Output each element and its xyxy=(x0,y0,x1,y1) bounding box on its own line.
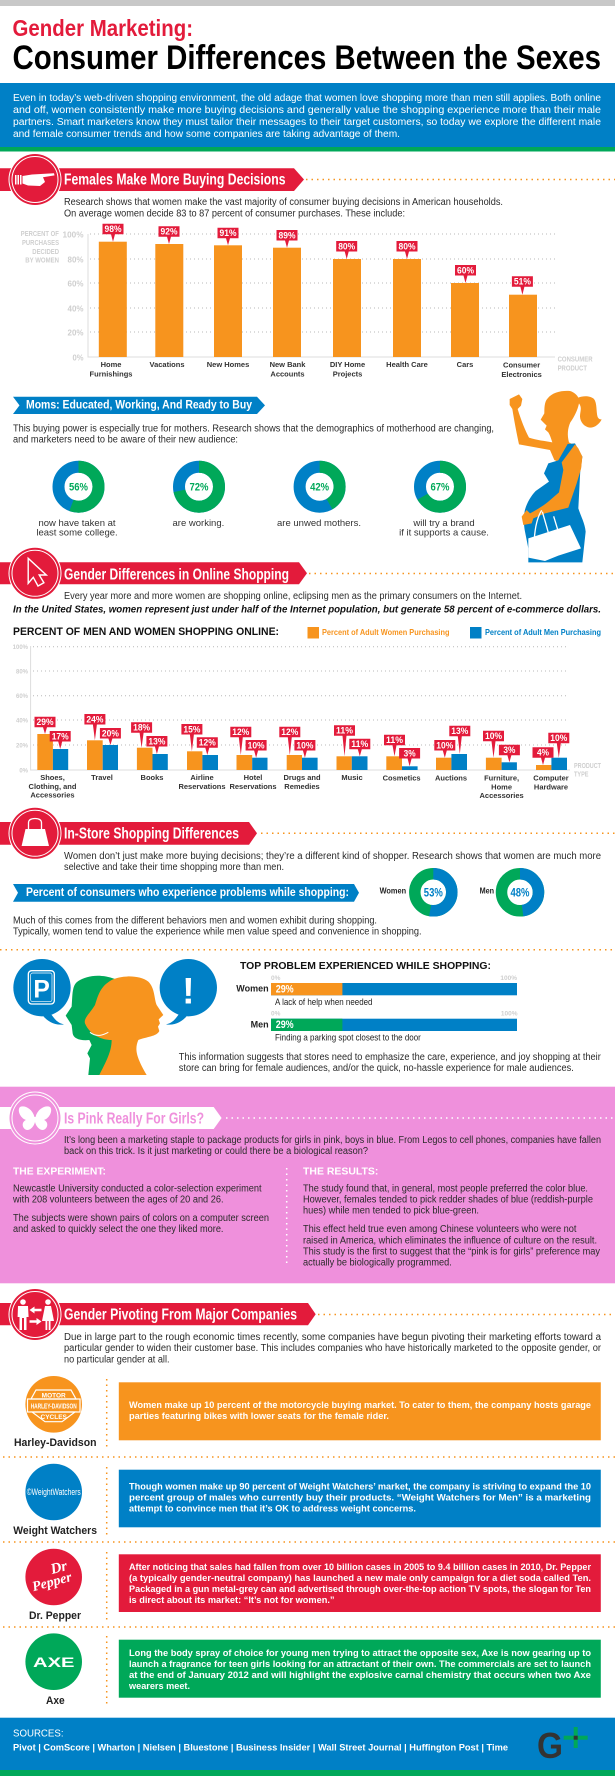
column: the experiment: THE EXPERIMENT: xyxy=(13,1165,106,1177)
company: weight watchers: percent group of males who currently buy their products. “Weight Watchers for Men” is a marketing xyxy=(129,1493,591,1504)
icon: shopping bag xyxy=(22,818,49,846)
bars: airline reservations xyxy=(178,724,226,791)
donut: 42% unwed xyxy=(277,467,361,529)
ribbon: moms xyxy=(13,397,265,414)
text: pivoting intro xyxy=(64,1332,602,1366)
axis labels: 40% xyxy=(16,718,29,724)
bars: cosmetics: 3% xyxy=(404,748,416,759)
bars: cosmetics: Cosmetics xyxy=(383,774,421,782)
bars: furniture, home accessories: Accessories xyxy=(479,791,524,800)
bars: drugs and remedies xyxy=(279,727,321,791)
axis labels: DECIDED xyxy=(32,247,59,256)
axis labels: PRODUCT xyxy=(558,364,587,373)
bars: shoes, clothing and accessories: 17% xyxy=(52,731,69,742)
company: weight watchers xyxy=(13,1464,601,1537)
bar: vacations 92%: 92% xyxy=(160,227,178,238)
bar: new homes 91%: 91% xyxy=(220,228,237,239)
bars: airline reservations: Airline xyxy=(190,773,214,782)
bars: travel: Travel xyxy=(91,773,113,782)
bars: hotel reservations: Hotel xyxy=(244,773,262,782)
legend: Percent of Adult Women Purchasing xyxy=(322,627,450,637)
bar: home furnishings 98%: Home xyxy=(101,360,121,369)
icon: butterfly xyxy=(19,1106,51,1130)
icon: parking speech bubble: P xyxy=(33,977,50,1004)
logo: dr pepper xyxy=(25,1549,82,1605)
logo: G+: G xyxy=(537,1725,563,1766)
bar: men top problem: Finding a parking spot closest to the door xyxy=(275,1033,421,1043)
logo: harley-davidson: CYCLES xyxy=(41,1414,68,1421)
bar chart: purchases decided by women xyxy=(21,224,593,379)
panel: introduction: partners. Smart marketers know they must tailor their messages to their target customers, so today we explore the different male xyxy=(13,117,601,128)
axis labels: PRODUCT xyxy=(574,761,601,770)
company: dr. pepper: After noticing that sales had fallen from over 10 billion cases in 2005 to 9.4 billion cases in 2010, Dr. Pepper xyxy=(129,1562,591,1573)
bar: women top problem xyxy=(236,975,517,1007)
donut: 67% cause: if it supports a cause. xyxy=(399,528,489,539)
text: buying decisions intro xyxy=(64,197,503,220)
bars: drugs and remedies: Remedies xyxy=(284,782,320,791)
text: buying decisions intro: Research shows that women make the vast majority of consumer buying decisions in American households. xyxy=(64,197,503,208)
bars: music: 11% xyxy=(336,726,353,737)
text: buying decisions intro: On average women decide 83 to 87 percent of consumer purchases. These include: xyxy=(64,209,405,220)
bar: men top problem: Men xyxy=(251,1020,269,1030)
bars: auctions: 10% xyxy=(436,740,454,751)
bars: hotel reservations: Reservations xyxy=(229,782,277,791)
company: dr. pepper xyxy=(25,1549,601,1622)
axis labels: PERCENT OF xyxy=(21,229,59,238)
bars: furniture, home accessories xyxy=(479,731,524,800)
section heading: gender pivoting: Gender Pivoting From Major Companies xyxy=(64,1306,297,1323)
text: in-store intro xyxy=(64,851,601,873)
bar: consumer electronics 51%: Consumer xyxy=(503,360,540,370)
bars: shoes, clothing and accessories: Shoes, xyxy=(40,773,65,782)
axis labels: 100% xyxy=(62,230,84,240)
donut: men 48% xyxy=(480,874,538,911)
section heading: online shopping: Gender Differences in Online Shopping xyxy=(64,566,289,583)
section heading: gender pivoting xyxy=(0,1288,615,1341)
axis labels: 100% xyxy=(13,645,29,651)
bar: women top problem: A lack of help when needed xyxy=(275,997,372,1007)
donut: 56% college: least some college. xyxy=(36,528,118,539)
logo: axe: AXE xyxy=(33,1655,74,1670)
bar: new bank accounts 89% xyxy=(270,230,306,379)
logo: dr pepper: Pepper xyxy=(31,1570,74,1595)
company: dr. pepper: (a typically gender-neutral company) has launched a new male only campaign for a diet soda called Ten. xyxy=(129,1573,591,1584)
bar: new homes 91% xyxy=(207,228,249,369)
donut: 72% working xyxy=(173,467,224,529)
icon: two heads with speech bubbles xyxy=(13,959,217,1075)
company: axe: launch a fragrance for teen girls looking for an attractant of their own. The commercials are set to launch xyxy=(129,1659,591,1670)
icon: parking speech bubble xyxy=(13,959,71,1025)
bars: cosmetics: 11% xyxy=(386,735,403,746)
bar: men top problem: 29% xyxy=(276,1019,294,1031)
bar: home furnishings 98%: Furnishings xyxy=(90,370,132,379)
company: axe: Axe xyxy=(46,1695,65,1707)
icon: pointing hand xyxy=(15,173,54,186)
bar: women top problem: 0% xyxy=(271,975,281,982)
bars: airline reservations: 12% xyxy=(199,738,216,749)
axis labels xyxy=(21,229,593,373)
icon: man, woman and arrows xyxy=(18,1299,54,1330)
axis labels: BY WOMEN xyxy=(25,256,59,264)
axis labels: PURCHASES xyxy=(22,238,59,247)
column: the results: actually be biologically programmed. xyxy=(303,1257,452,1268)
column: the experiment: and asked to quickly select the one they liked more. xyxy=(13,1224,224,1235)
company: dr. pepper: Packaged in a gun metal-grey can and advertised through over-the-top action TV spots, the slogan for Ten xyxy=(129,1584,591,1595)
heading: top problem: TOP PROBLEM EXPERIENCED WHILE SHOPPING: xyxy=(240,960,491,972)
donut: women 53%: 53% xyxy=(424,888,443,900)
axis labels: 40% xyxy=(68,304,84,314)
logo: weight watchers: ©WeightWatchers xyxy=(27,1487,81,1497)
text: in-store intro: selective and take their time shopping more than men. xyxy=(64,862,284,873)
donut: 67% cause: will try a brand xyxy=(412,518,475,529)
bars: furniture, home accessories: 3% xyxy=(503,745,516,756)
bars: travel: 24% xyxy=(86,714,104,725)
text: buying power of mothers xyxy=(13,424,494,446)
donut: 42% unwed: are unwed mothers. xyxy=(277,518,361,529)
bars: airline reservations: Reservations xyxy=(178,782,226,791)
text: store suggestions: store can bring for female audiences, and/or the quick, no-hassle experience for male audiences. xyxy=(179,1063,574,1074)
text: online shopping intro: Every year more and more women are shopping online, eclipsing men as the primary consumers on the Internet. xyxy=(64,591,522,602)
donut: men 48%: 48% xyxy=(510,888,530,900)
donut: women 53% xyxy=(380,874,452,911)
text: buying power of mothers: This buying power is especially true for mothers. Research shows that the demographics of motherhood are changing, xyxy=(13,424,494,435)
ribbon: consumers who experience problems: Percent of consumers who experience problems while shopping: xyxy=(26,887,349,899)
donut: 72% working: are working. xyxy=(173,518,224,529)
text: online shopping intro: In the United States, women represent just under half of the Internet population, but generate 58 percent of e-commerce dollars. xyxy=(13,605,601,616)
icon: exclamation speech bubble: ! xyxy=(182,969,195,1011)
text: pivoting intro: no particular gender at all. xyxy=(64,1354,170,1366)
legend: Percent of Adult Men Purchasing xyxy=(485,627,601,637)
bars: computer hardware: 10% xyxy=(550,733,568,744)
text: pivoting intro: Due in large part to the rough economic times recently, some companies have begun pivoting their marketing efforts toward a xyxy=(64,1332,601,1343)
bars: books: Books xyxy=(141,773,163,782)
bars: travel: 20% xyxy=(102,728,119,739)
column: the experiment xyxy=(12,1165,269,1235)
bar: home furnishings 98%: 98% xyxy=(104,224,122,235)
section heading: pink: Is Pink Really For Girls? xyxy=(64,1110,204,1127)
company: dr. pepper: is direct about its market: “It’s not for women.” xyxy=(129,1595,335,1606)
column: the results: THE RESULTS: xyxy=(303,1165,378,1177)
logo: harley-davidson: MOTOR xyxy=(42,1392,66,1400)
bar: consumer electronics 51%: Electronics xyxy=(501,370,542,379)
donut: 67% cause xyxy=(399,467,489,539)
column: the results: hues) while men tended to pick blue-green. xyxy=(303,1206,479,1217)
donut: 56% college xyxy=(36,467,118,539)
bars: airline reservations: 15% xyxy=(183,724,201,735)
bar: consumer electronics 51% xyxy=(501,276,542,379)
bars: travel xyxy=(84,714,121,782)
icon: pregnant woman shopping xyxy=(510,391,602,562)
company: axe: Long the body spray of choice for young men trying to attract the opposite sex, Axe is now gearing up to xyxy=(129,1648,591,1659)
ribbon: consumers who experience problems xyxy=(13,884,359,902)
axis labels: 60% xyxy=(16,694,29,700)
bar: health care 80% xyxy=(386,241,428,369)
bars: books: 13% xyxy=(148,736,166,747)
bars: drugs and remedies: 12% xyxy=(281,727,299,738)
bar: new bank accounts 89%: 89% xyxy=(278,230,296,241)
bar: diy home projects 80%: Projects xyxy=(333,370,362,379)
axis labels: 80% xyxy=(16,670,29,676)
bar: women top problem: Women xyxy=(236,984,269,994)
bars: furniture, home accessories: 10% xyxy=(485,731,502,742)
column: the results xyxy=(303,1165,600,1268)
bars: auctions: 13% xyxy=(451,726,469,737)
bar: diy home projects 80%: DIY Home xyxy=(330,360,365,369)
axis labels: 20% xyxy=(16,744,29,750)
footer: sources: SOURCES: xyxy=(13,1728,64,1740)
footer: sources: Pivot | ComScore | Wharton | Nielsen | Bluestone | Business Insider | Wall Street Journal | Huffington Post | Time xyxy=(13,1742,508,1753)
axis labels: 0% xyxy=(19,768,29,774)
bars: hotel reservations xyxy=(229,727,277,791)
axis labels: 60% xyxy=(68,278,84,288)
axis labels: 80% xyxy=(68,254,84,264)
bar: new bank accounts 89%: New Bank xyxy=(270,360,306,369)
footer: sources xyxy=(0,1718,615,1776)
section heading: online shopping xyxy=(0,547,615,600)
column: the results: The study found that, in general, most people preferred the color blue. xyxy=(303,1184,588,1195)
bar: men top problem: 100% xyxy=(501,1011,518,1018)
axis labels: 0% xyxy=(72,352,84,362)
logo: G+ xyxy=(537,1725,588,1766)
axis labels: TYPE xyxy=(574,770,588,779)
title: Gender Marketing: xyxy=(12,15,193,41)
axis labels: 20% xyxy=(68,328,84,338)
column: the experiment: Newcastle University conducted a color-selection experiment xyxy=(13,1184,262,1195)
company: harley-davidson: parties featuring bikes with lower seats for the female rider. xyxy=(129,1411,389,1422)
logo: harley-davidson: HARLEY-DAVIDSON xyxy=(31,1402,77,1410)
text: buying power of mothers: and marketers need to be aware of their new audience: xyxy=(13,435,238,446)
bar: new homes 91%: New Homes xyxy=(207,360,249,369)
bar: women top problem: 100% xyxy=(500,975,517,982)
section heading: in-store shopping: In-Store Shopping Differences xyxy=(64,826,239,843)
section heading: females make more buying decisions xyxy=(0,153,615,206)
bars: drugs and remedies: 10% xyxy=(296,740,314,751)
title xyxy=(12,15,601,77)
bars: auctions xyxy=(434,726,470,782)
bars: hotel reservations: 12% xyxy=(232,727,250,738)
column: the results: raised in America, which eliminates the influence of culture on the result. xyxy=(303,1235,597,1246)
company: axe: wearers meet. xyxy=(128,1681,190,1692)
company: axe: at the end of January 2012 and will highlight the explosive carnal chemistry that occurs when two Axe xyxy=(129,1670,591,1681)
bar: cars 60%: Cars xyxy=(457,360,473,369)
bars: computer hardware xyxy=(532,733,569,792)
bar: women top problem: 29% xyxy=(276,984,294,996)
bar: men top problem: 0% xyxy=(271,1011,281,1018)
legend xyxy=(308,627,601,638)
panel: is pink really for girls xyxy=(0,1087,615,1283)
bars: cosmetics xyxy=(383,735,421,782)
bar: vacations 92% xyxy=(149,226,185,369)
bars: shoes, clothing and accessories: 29% xyxy=(36,717,54,728)
bar: diy home projects 80%: 80% xyxy=(338,241,356,252)
bar: new bank accounts 89%: Accounts xyxy=(270,370,305,379)
company: harley-davidson xyxy=(14,1376,601,1449)
bar chart: online shopping by product type xyxy=(13,645,601,800)
panel: introduction xyxy=(0,83,615,152)
bars: computer hardware: Computer xyxy=(533,774,569,782)
bars: hotel reservations: 10% xyxy=(248,740,265,751)
panel: introduction: and off, women consistently make more buying decisions and generally value the shopping experience more than their male xyxy=(13,105,601,116)
column: the experiment: with 208 volunteers between the ages of 20 and 26. xyxy=(12,1195,223,1206)
bars: drugs and remedies: Drugs and xyxy=(283,773,321,782)
text: behaviours: Much of this comes from the different behaviors men and women exhibit during shopping. xyxy=(13,915,377,926)
company: weight watchers: Weight Watchers xyxy=(13,1525,97,1537)
bars: auctions: Auctions xyxy=(435,774,467,782)
panel: introduction: and female consumer trends and how some companies are taking advantage of them. xyxy=(13,129,400,140)
bars: music xyxy=(334,725,370,782)
donut: 56% college: now have taken at xyxy=(38,518,116,529)
donut: 72% working: 72% xyxy=(190,481,209,493)
logo: harley-davidson xyxy=(25,1376,82,1433)
icon: exclamation speech bubble xyxy=(160,959,217,1025)
logo: axe xyxy=(25,1633,82,1690)
bar: consumer electronics 51%: 51% xyxy=(514,277,531,288)
text: behaviours xyxy=(13,915,422,937)
text: in-store intro: Women don’t just make more buying decisions; they’re a different kind of shopper. Research shows that women are much more xyxy=(64,851,601,862)
company: harley-davidson: Women make up 10 percent of the motorcycle buying market. To cater to them, the company hosts garage xyxy=(129,1400,591,1411)
bars: books: 18% xyxy=(133,723,151,734)
ribbon: moms: Moms: Educated, Working, And Ready to Buy xyxy=(26,400,253,412)
icon: cursor xyxy=(28,558,46,586)
company: dr. pepper: Dr. Pepper xyxy=(29,1610,82,1622)
donut: men 48%: Men xyxy=(480,885,494,895)
company: weight watchers: attempt to convince men that it’s OK to address weight concerns. xyxy=(129,1504,416,1515)
bars: books xyxy=(131,722,168,782)
logo: weight watchers xyxy=(25,1464,82,1520)
bar: home furnishings 98% xyxy=(90,224,132,379)
text: behaviours: Typically, women tend to value the experience while men value speed and convenience in shopping. xyxy=(13,926,422,937)
section heading: in-store shopping xyxy=(0,807,615,860)
bars: shoes, clothing and accessories: Accessories xyxy=(30,791,75,800)
logo: dr pepper: Dr xyxy=(48,1558,69,1578)
column: the experiment: The subjects were shown pairs of colors on a computer screen xyxy=(13,1213,269,1224)
company: weight watchers: Though women make up 90 percent of Weight Watchers’ market, the company is striving to expand the 10 xyxy=(129,1481,591,1492)
bars: shoes, clothing and accessories xyxy=(29,717,77,800)
bar: diy home projects 80% xyxy=(330,241,365,379)
bar: cars 60%: 60% xyxy=(457,265,474,276)
text: store suggestions xyxy=(179,1052,601,1074)
bar: vacations 92%: Vacations xyxy=(149,360,185,369)
column: the results: However, females tended to pick redder shades of blue (reddish-purple xyxy=(303,1195,593,1206)
bars: furniture, home accessories: Furniture, xyxy=(484,774,519,782)
section heading: females make more buying decisions: Females Make More Buying Decisions xyxy=(64,172,286,189)
donut: women 53%: Women xyxy=(380,885,406,895)
company: axe xyxy=(25,1633,601,1707)
axis labels xyxy=(13,645,601,779)
bars: furniture, home accessories: Home xyxy=(491,782,512,792)
axis labels: CONSUMER xyxy=(558,355,593,364)
bar: health care 80%: 80% xyxy=(398,241,416,252)
section heading: pink xyxy=(0,1092,615,1144)
bars: computer hardware: Hardware xyxy=(534,782,568,792)
bar: health care 80%: Health Care xyxy=(386,360,428,369)
bar: cars 60% xyxy=(451,265,479,369)
donut: 67% cause: 67% xyxy=(430,481,450,493)
text: pink intro xyxy=(64,1135,601,1157)
bars: music: Music xyxy=(341,773,363,782)
bars: computer hardware: 4% xyxy=(537,748,549,759)
text: online shopping intro xyxy=(13,591,601,616)
donut: 42% unwed: 42% xyxy=(310,481,329,493)
column: the results: This effect held true even among Chinese volunteers who were not xyxy=(303,1224,577,1235)
donut: 56% college: 56% xyxy=(69,481,88,493)
bar: men top problem xyxy=(251,1011,518,1043)
text: pink intro: back on this trick. Is it just marketing or could there be a biological reason? xyxy=(64,1146,368,1157)
heading: percent of men and women shopping online: PERCENT OF MEN AND WOMEN SHOPPING ONLINE: xyxy=(13,626,279,638)
company: harley-davidson: Harley-Davidson xyxy=(14,1437,97,1449)
bars: music: 11% xyxy=(351,739,369,750)
bars: shoes, clothing and accessories: Clothing, and xyxy=(29,782,77,791)
panel: introduction: Even in today’s web-driven shopping environment, the old adage that women love shopping more than men still applies. Both online xyxy=(13,93,601,104)
